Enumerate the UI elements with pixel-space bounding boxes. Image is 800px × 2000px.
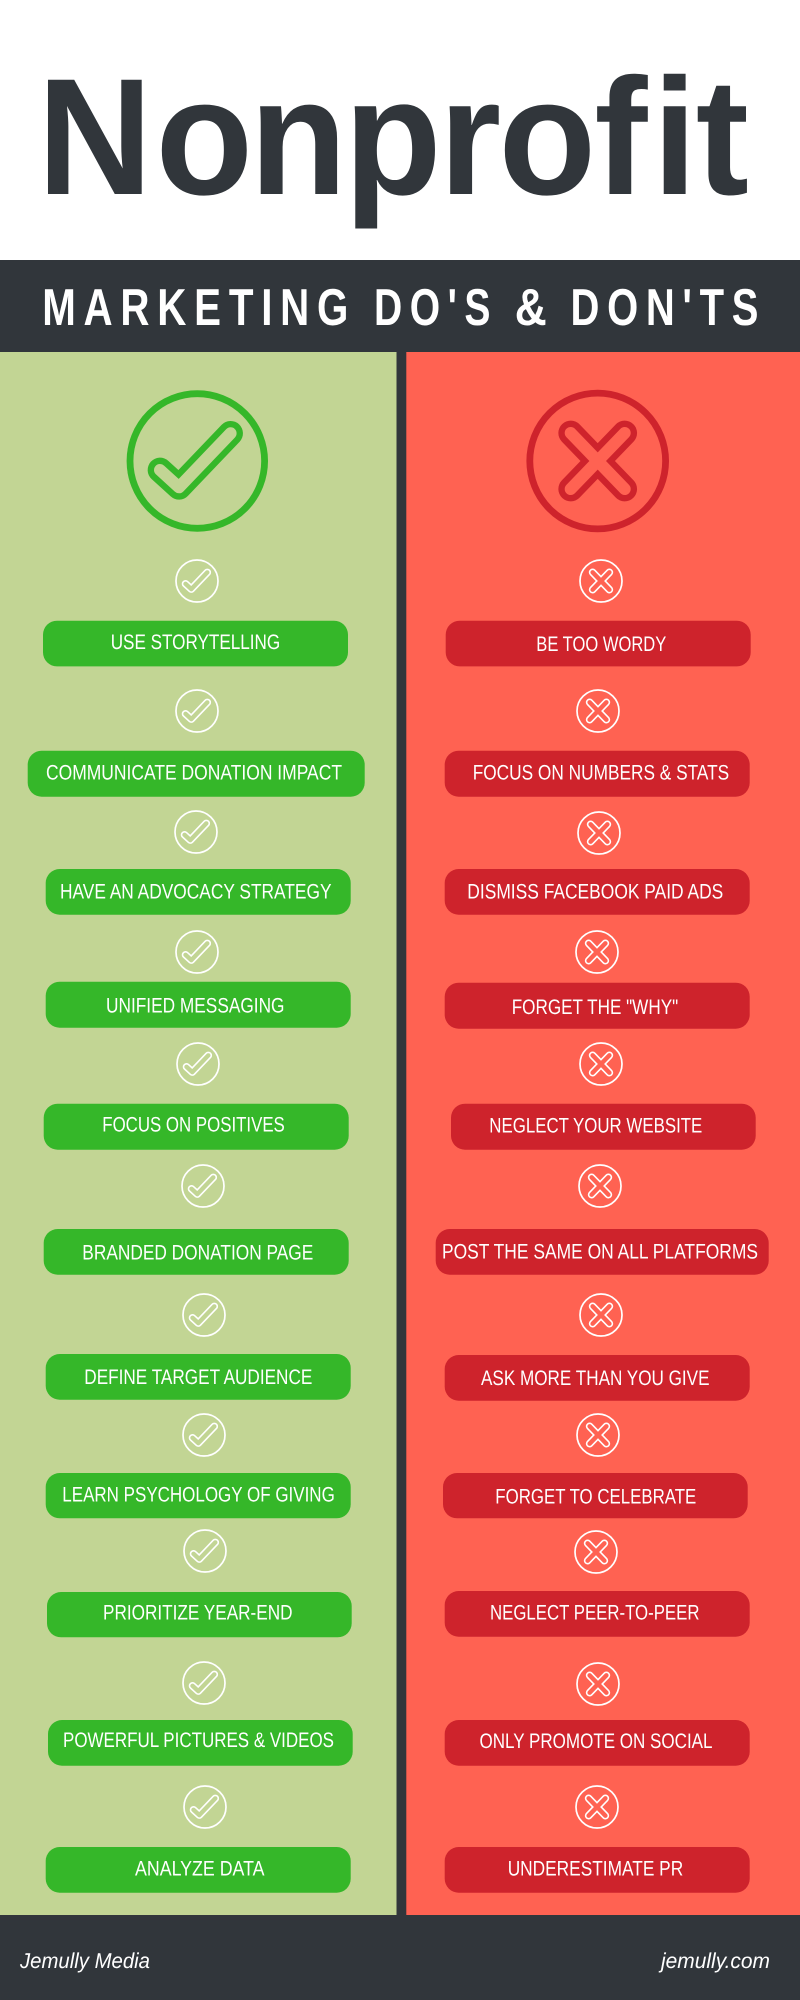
footer: website: jemully.com [658,1949,770,1973]
subtitle: DO'S [374,279,498,337]
item: powerful pictures and videos: POWERFUL PICTURES & VIDEOS [63,1729,334,1752]
subtitle band [0,260,800,352]
item: analyze data: ANALYZE DATA [135,1857,264,1880]
icon: big x [530,393,666,529]
item: neglect peer-to-peer: NEGLECT PEER-TO-PEER [490,1601,700,1624]
item: unified messaging [46,982,351,1028]
item: powerful pictures and videos [48,1720,353,1766]
icon: x 10 [577,1663,619,1705]
item: prioritize year-end [47,1592,352,1637]
item: be too wordy: BE TOO WORDY [536,633,666,656]
item: neglect peer-to-peer [445,1591,750,1637]
icon: check 6 [182,1165,224,1207]
icon: x 1 [580,560,622,602]
item: forget to celebrate [443,1473,748,1518]
item: ask more than you give: ASK MORE THAN YOU GIVE [481,1367,710,1390]
item: have an advocacy strategy [46,869,351,915]
footer: organization name: Jemully Media [19,1949,150,1973]
icon: x 11 [576,1786,618,1828]
panel: do's [0,352,396,1915]
icon: x 8 [577,1414,619,1456]
icon: x 6 [579,1165,621,1207]
item: unified messaging: UNIFIED MESSAGING [106,994,284,1017]
item: use storytelling: USE STORYTELLING [111,631,280,654]
title: Nonprofit [37,45,749,230]
icon: check 1 [176,560,218,602]
item: focus on numbers and stats [445,751,750,797]
icon: check 11 [184,1786,226,1828]
item: have an advocacy strategy: HAVE AN ADVOCACY STRATEGY [60,880,332,903]
subtitle [42,279,766,337]
icon: check 9 [184,1530,226,1572]
icon: check 4 [176,931,218,973]
icon: check 3 [175,811,217,853]
item: branded donation page: BRANDED DONATION PAGE [82,1241,313,1264]
item: forget to celebrate: FORGET TO CELEBRATE [495,1486,696,1509]
item: underestimate pr: UNDERESTIMATE PR [508,1857,683,1880]
item: only promote on social [445,1720,750,1766]
icon: x 2 [577,690,619,732]
icon: check 2 [176,690,218,732]
subtitle: MARKETING [42,279,356,337]
item: learn psychology of giving [46,1473,351,1518]
item: forget the why: FORGET THE "WHY" [512,996,678,1019]
item: prioritize year-end: PRIORITIZE YEAR-END [103,1601,292,1624]
item: focus on numbers and stats: FOCUS ON NUMBERS & STATS [473,761,729,784]
item: dismiss facebook paid ads: DISMISS FACEBOOK PAID ADS [467,880,723,903]
item: ask more than you give [445,1355,750,1401]
icon: x 4 [576,931,618,973]
icon: check 10 [183,1662,225,1704]
icon: big check [130,394,265,528]
item: only promote on social: ONLY PROMOTE ON SOCIAL [480,1730,712,1753]
icon: x 9 [575,1531,617,1573]
item: dismiss facebook paid ads [445,869,750,915]
item: learn psychology of giving: LEARN PSYCHOLOGY OF GIVING [62,1483,335,1506]
item: focus on positives [44,1104,349,1150]
item: underestimate pr [445,1847,750,1893]
item: define target audience: DEFINE TARGET AUDIENCE [84,1366,312,1389]
icon: check 5 [177,1043,219,1085]
item: communicate donation impact [28,751,365,797]
panel: don'ts [406,352,800,1915]
icon: check 7 [183,1294,225,1336]
icon: x 5 [580,1043,622,1085]
item: neglect your website: NEGLECT YOUR WEBSITE [489,1114,702,1137]
item: analyze data [46,1847,351,1893]
item: forget the why [445,983,750,1029]
item: be too wordy [446,621,751,666]
subtitle: & [515,279,547,337]
item: focus on positives: FOCUS ON POSITIVES [102,1113,285,1136]
icon: x 3 [578,812,620,854]
item: communicate donation impact: COMMUNICATE DONATION IMPACT [46,761,342,784]
icon: check 8 [183,1414,225,1456]
item: post the same on all platforms [436,1229,769,1275]
icon: x 7 [580,1294,622,1336]
item: define target audience [46,1354,351,1400]
item: branded donation page [44,1229,349,1275]
item: use storytelling [43,621,348,666]
item: neglect your website [451,1104,756,1150]
